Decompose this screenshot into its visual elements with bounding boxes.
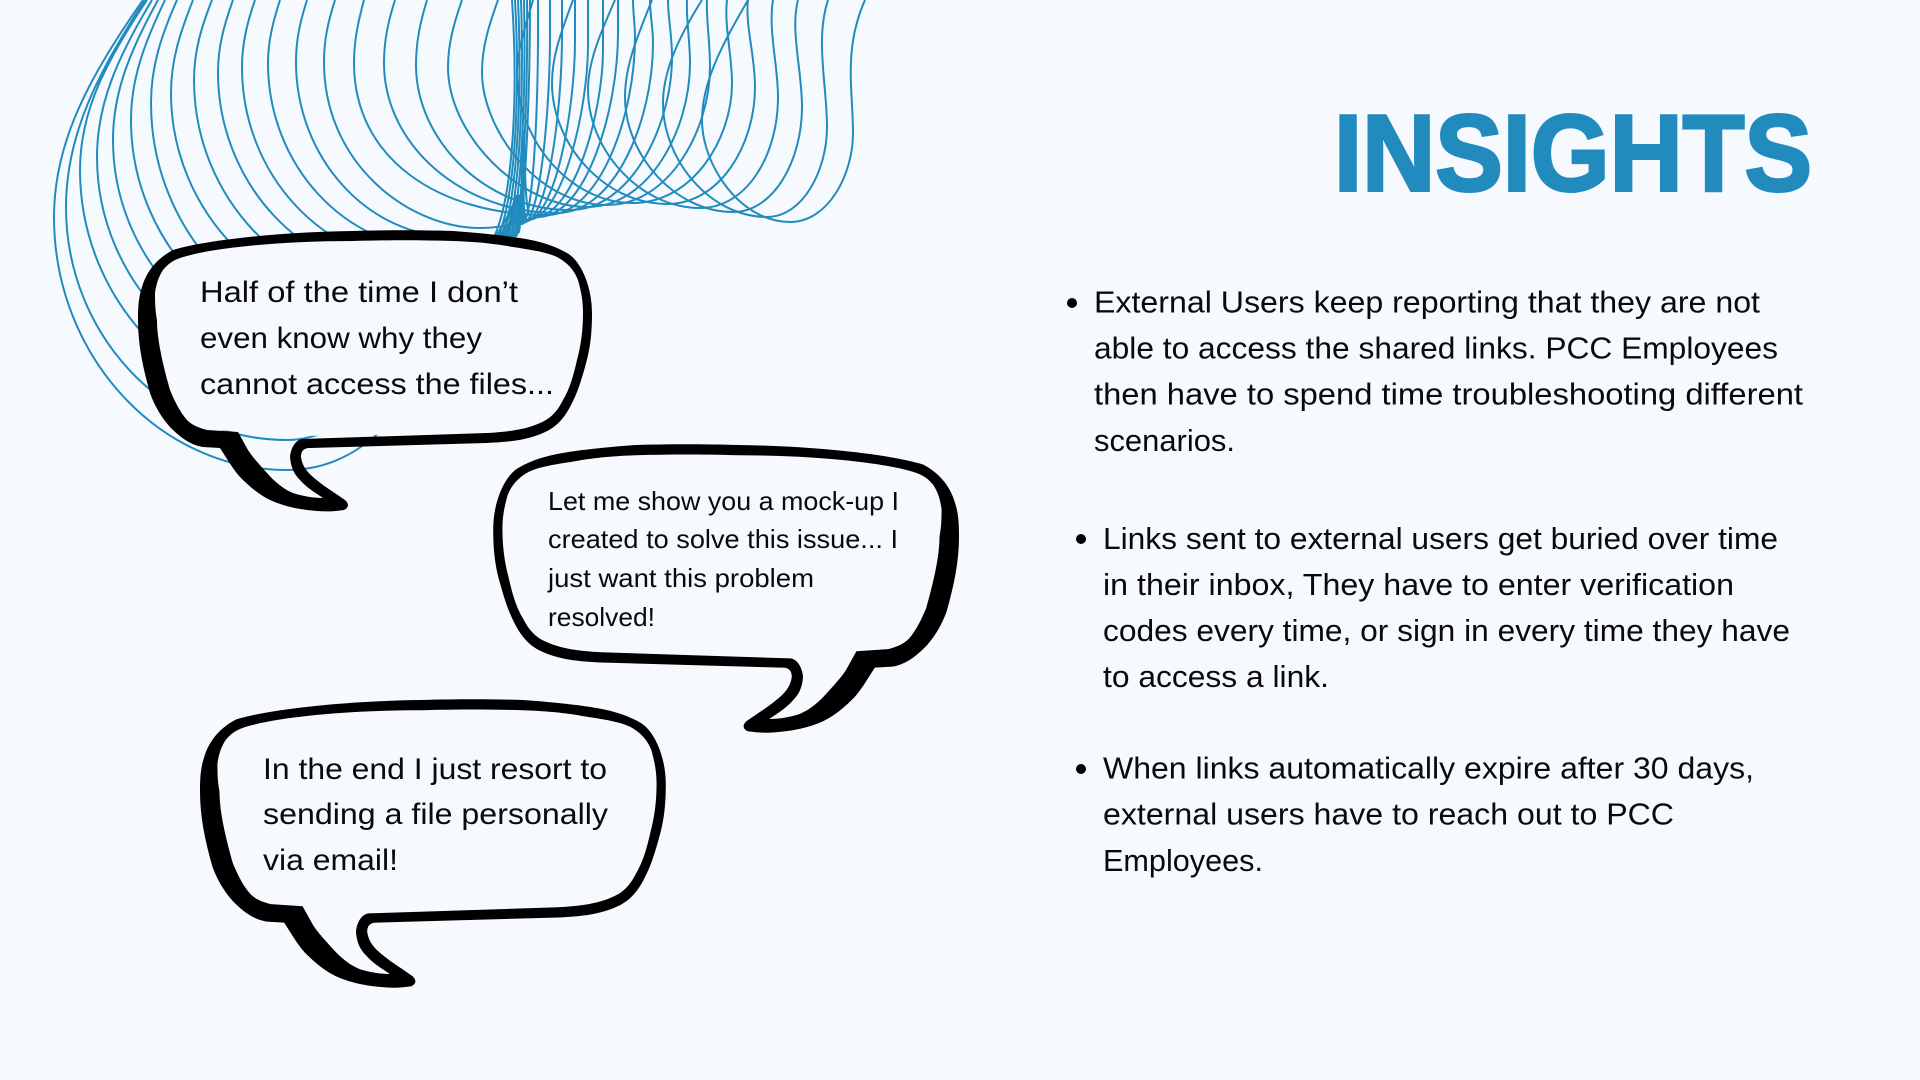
speech bubble 1: even know why they: [200, 322, 482, 355]
insight bullet 2: to access a link.: [1103, 659, 1329, 694]
speech bubble 1: cannot access the files...: [200, 368, 554, 401]
insight bullet 1: then have to spend time troubleshooting different: [1094, 376, 1803, 412]
speech bubble 1: Half of the time I don’t: [200, 276, 519, 309]
speech bubble 3: via email!: [263, 844, 398, 877]
speech bubble 3: [200, 699, 666, 988]
speech bubble 3: In the end I just resort to: [263, 753, 607, 786]
insight bullet 2: codes every time, or sign in every time they have: [1103, 613, 1790, 648]
insight bullet 1: External Users keep reporting that they are not: [1094, 284, 1760, 320]
insight bullet 3: Employees.: [1103, 843, 1263, 878]
insight bullet 2: [1076, 521, 1790, 694]
insight bullet 3: external users have to reach out to PCC: [1103, 796, 1674, 832]
decorative blue line wave: [54, 0, 865, 470]
speech bubble 3: sending a file personally: [263, 798, 608, 831]
speech bubble 2: [493, 444, 959, 733]
insight bullet 1: [1067, 284, 1803, 458]
speech bubble 2: Let me show you a mock-up I: [548, 486, 899, 516]
insight bullet 2: Links sent to external users get buried over time: [1103, 521, 1778, 556]
insight bullet 3: [1076, 750, 1754, 878]
speech bubble 2: created to solve this issue... I: [548, 524, 898, 554]
speech bubble 1: [138, 230, 592, 511]
insight bullet 3: When links automatically expire after 30 days,: [1103, 750, 1754, 786]
speech bubble 2: just want this problem: [547, 563, 814, 593]
speech bubble 2: resolved!: [548, 602, 655, 632]
insight bullet 2: in their inbox, They have to enter verification: [1103, 567, 1734, 602]
insight bullet 1: able to access the shared links. PCC Employees: [1094, 330, 1778, 366]
insight bullet 1: scenarios.: [1094, 423, 1235, 458]
title: INSIGHTS: [1334, 92, 1812, 214]
